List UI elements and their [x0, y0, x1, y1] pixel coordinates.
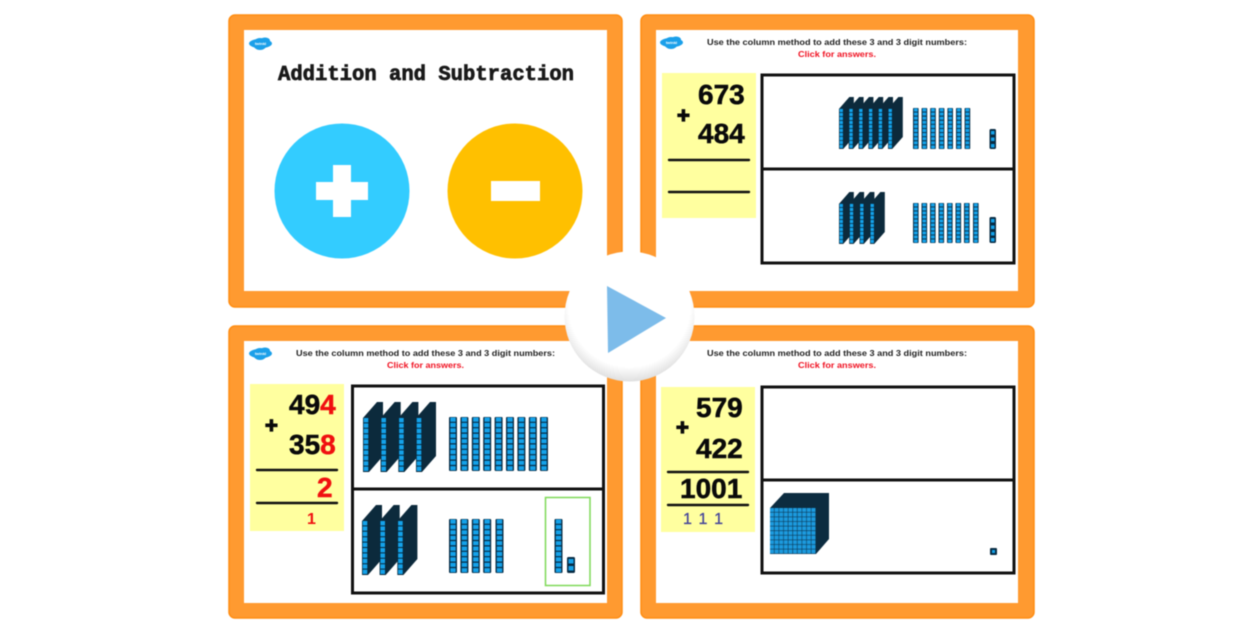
sum card: 1001 — [680, 473, 742, 504]
sum card: 673 — [698, 79, 745, 110]
sum card: 422 — [696, 433, 743, 464]
icon: logo — [660, 36, 683, 49]
icon: minus circle — [448, 124, 582, 258]
heading: Addition and Subtraction — [278, 64, 574, 87]
panel: slide 494 + 358 — [229, 326, 622, 618]
sum card — [662, 73, 756, 218]
click prompt: Click for answers. — [798, 49, 876, 59]
sum card: + — [676, 415, 689, 440]
place value box — [762, 387, 1014, 573]
sum card — [661, 387, 755, 532]
sum card: 1 1 1 — [683, 511, 723, 528]
sum card: 1 — [307, 511, 316, 528]
base ten blocks: 358 — [362, 505, 504, 575]
instruction text: Use the column method to add these 3 and 3 digit numbers: — [707, 37, 967, 47]
place value box — [352, 386, 604, 593]
panel: slide 579 + 422 — [641, 326, 1034, 618]
sum card: + — [677, 103, 690, 128]
play button — [564, 252, 694, 382]
sum card: 358 — [289, 429, 336, 460]
panel: title slide — [229, 15, 622, 307]
icon: logo — [249, 348, 272, 360]
instruction text: Use the column method to add these 3 and 3 digit numbers: — [296, 348, 555, 358]
base ten blocks: 494 — [363, 402, 548, 472]
base ten blocks: 484 — [839, 192, 996, 244]
base ten blocks: 673 — [839, 97, 996, 149]
base ten block: unit — [990, 548, 997, 555]
sum card: + — [265, 413, 278, 438]
icon: plus circle — [274, 124, 410, 258]
instruction text: Use the column method to add these 3 and 3 digit numbers: — [707, 348, 967, 358]
sum card: 484 — [698, 118, 745, 149]
highlight: exchanged ten and units — [546, 498, 590, 586]
icon: logo — [249, 38, 272, 50]
sum card: 494 — [289, 389, 336, 420]
sum card — [250, 384, 344, 531]
click prompt: Click for answers. — [387, 360, 464, 370]
panel: slide 673 + 484 — [641, 15, 1034, 307]
click prompt: Click for answers. — [798, 360, 876, 370]
sum card: 2 — [317, 472, 333, 503]
place value box — [762, 75, 1014, 263]
sum card: 579 — [696, 392, 743, 423]
base ten block: thousand cube — [770, 493, 829, 554]
